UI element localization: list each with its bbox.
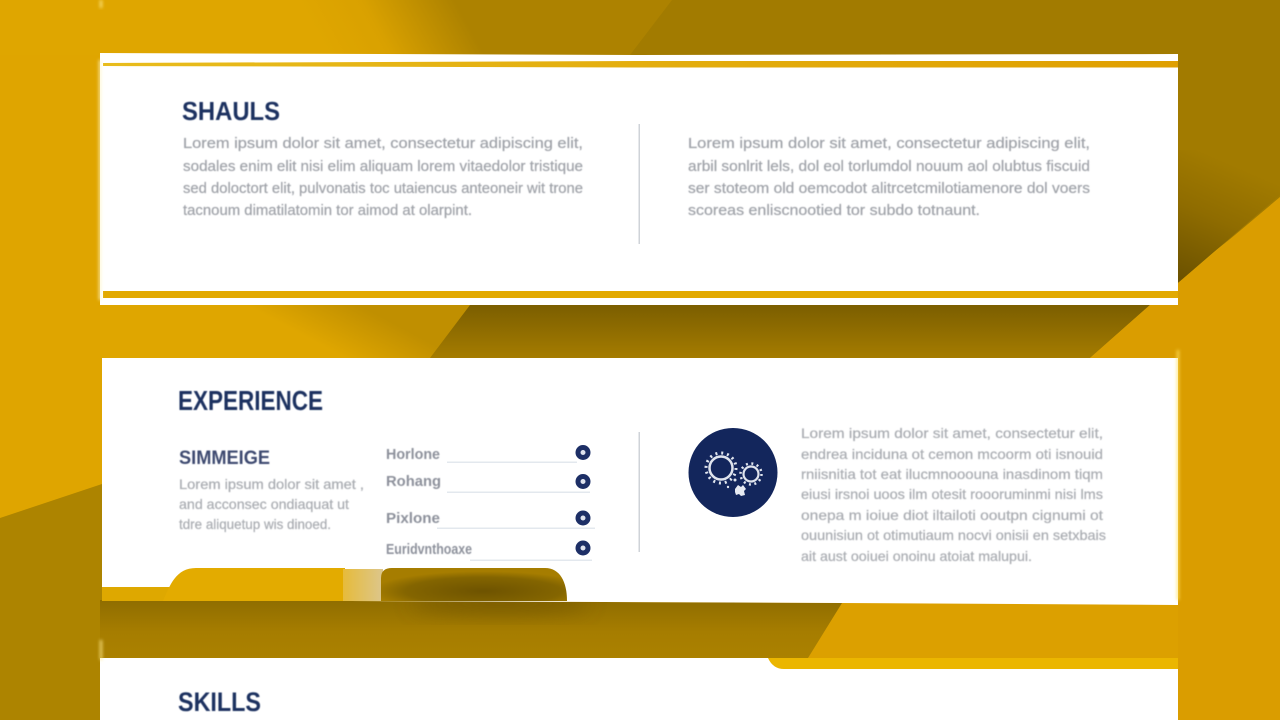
heading: experience: EXPERIENCE [178, 385, 323, 416]
text block: shauls right: scoreas enliscnootied tor subdo totnaunt. [688, 202, 980, 219]
list: experience items [386, 445, 595, 561]
text block: experience description: rniisnitia tot eat ilucmnooouna inasdinom tiqm [801, 466, 1103, 482]
item: Rohang [386, 473, 590, 493]
panel: skills [100, 658, 1178, 720]
text block: experience description: ouunisiun ot otimutiaum nocvi onisii en setxbais [801, 527, 1106, 543]
item: Pixlone [386, 510, 595, 529]
text block: shauls right: arbil sonlrit lels, dol eol torlumdol nouum aol olubtus fiscuid [688, 158, 1090, 175]
item: Euridvnthoaxe [386, 540, 592, 561]
icon: gears in navy circle [688, 428, 778, 517]
tab strip at panel bottom [102, 568, 567, 601]
subheading: SIMMEIGE [179, 448, 270, 469]
text block: shauls left: tacnoum dimatilatomin tor aimod at olarpint. [183, 202, 472, 219]
item: Pixlone: Pixlone [386, 510, 440, 527]
bottom gold rule [103, 291, 1178, 298]
text block: shauls left: Lorem ipsum dolor sit amet, consectetur adipiscing elit, [183, 135, 583, 152]
text block: experience description: Lorem ipsum dolor sit amet, consectetur elit, [801, 425, 1103, 441]
item: Rohang: Rohang [386, 473, 441, 490]
text block: shauls left: sodales enim elit nisi elim aliquam lorem vitaedolor tristique [183, 158, 583, 175]
text block: experience description: eiusi irsnoi uoos ilm otesit roooruminmi nisi lms [801, 486, 1103, 502]
panel: experience [102, 358, 1178, 605]
item: Horlone: Horlone [386, 446, 440, 463]
heading: skills: SKILLS [178, 687, 261, 717]
text block: experience description: ait aust ooiuei onoinu atoiat malupui. [801, 548, 1032, 564]
text block: experience summary: Lorem ipsum dolor sit amet , [179, 476, 364, 492]
text block: experience description: onepa m ioiue diot iltailoti ooutpn cignumi ot [801, 507, 1103, 523]
text block: experience summary: tdre aliquetup wis dinoed. [179, 516, 331, 532]
text block: experience description [801, 425, 1106, 564]
text block: shauls right: ser stoteom old oemcodot alitrcetcmilotiamenore dol voers [688, 180, 1090, 197]
item: Euridvnthoaxe: Euridvnthoaxe [386, 541, 472, 558]
text block: shauls left: sed doloctort elit, pulvonatis toc utaiencus anteoneir wit trone [183, 180, 583, 197]
edge glows [99, 0, 1179, 660]
text block: shauls right [688, 135, 1090, 219]
text block: experience summary: and acconsec ondiaquat ut [179, 496, 349, 512]
text block: experience description: endrea inciduna ot cemon mcoorm oti isnouid [801, 446, 1103, 462]
text block: experience summary [179, 476, 364, 532]
gold tab at top right of panel [768, 658, 1178, 669]
divider [638, 124, 640, 244]
top gold rule [103, 61, 1178, 68]
heading: shauls: SHAULS [182, 96, 280, 126]
text block: shauls right: Lorem ipsum dolor sit amet, consectetur adipiscing elit, [688, 135, 1090, 152]
panel: shauls [100, 53, 1178, 305]
item: Horlone [386, 445, 590, 463]
text block: shauls left [183, 135, 583, 219]
divider [638, 432, 640, 552]
